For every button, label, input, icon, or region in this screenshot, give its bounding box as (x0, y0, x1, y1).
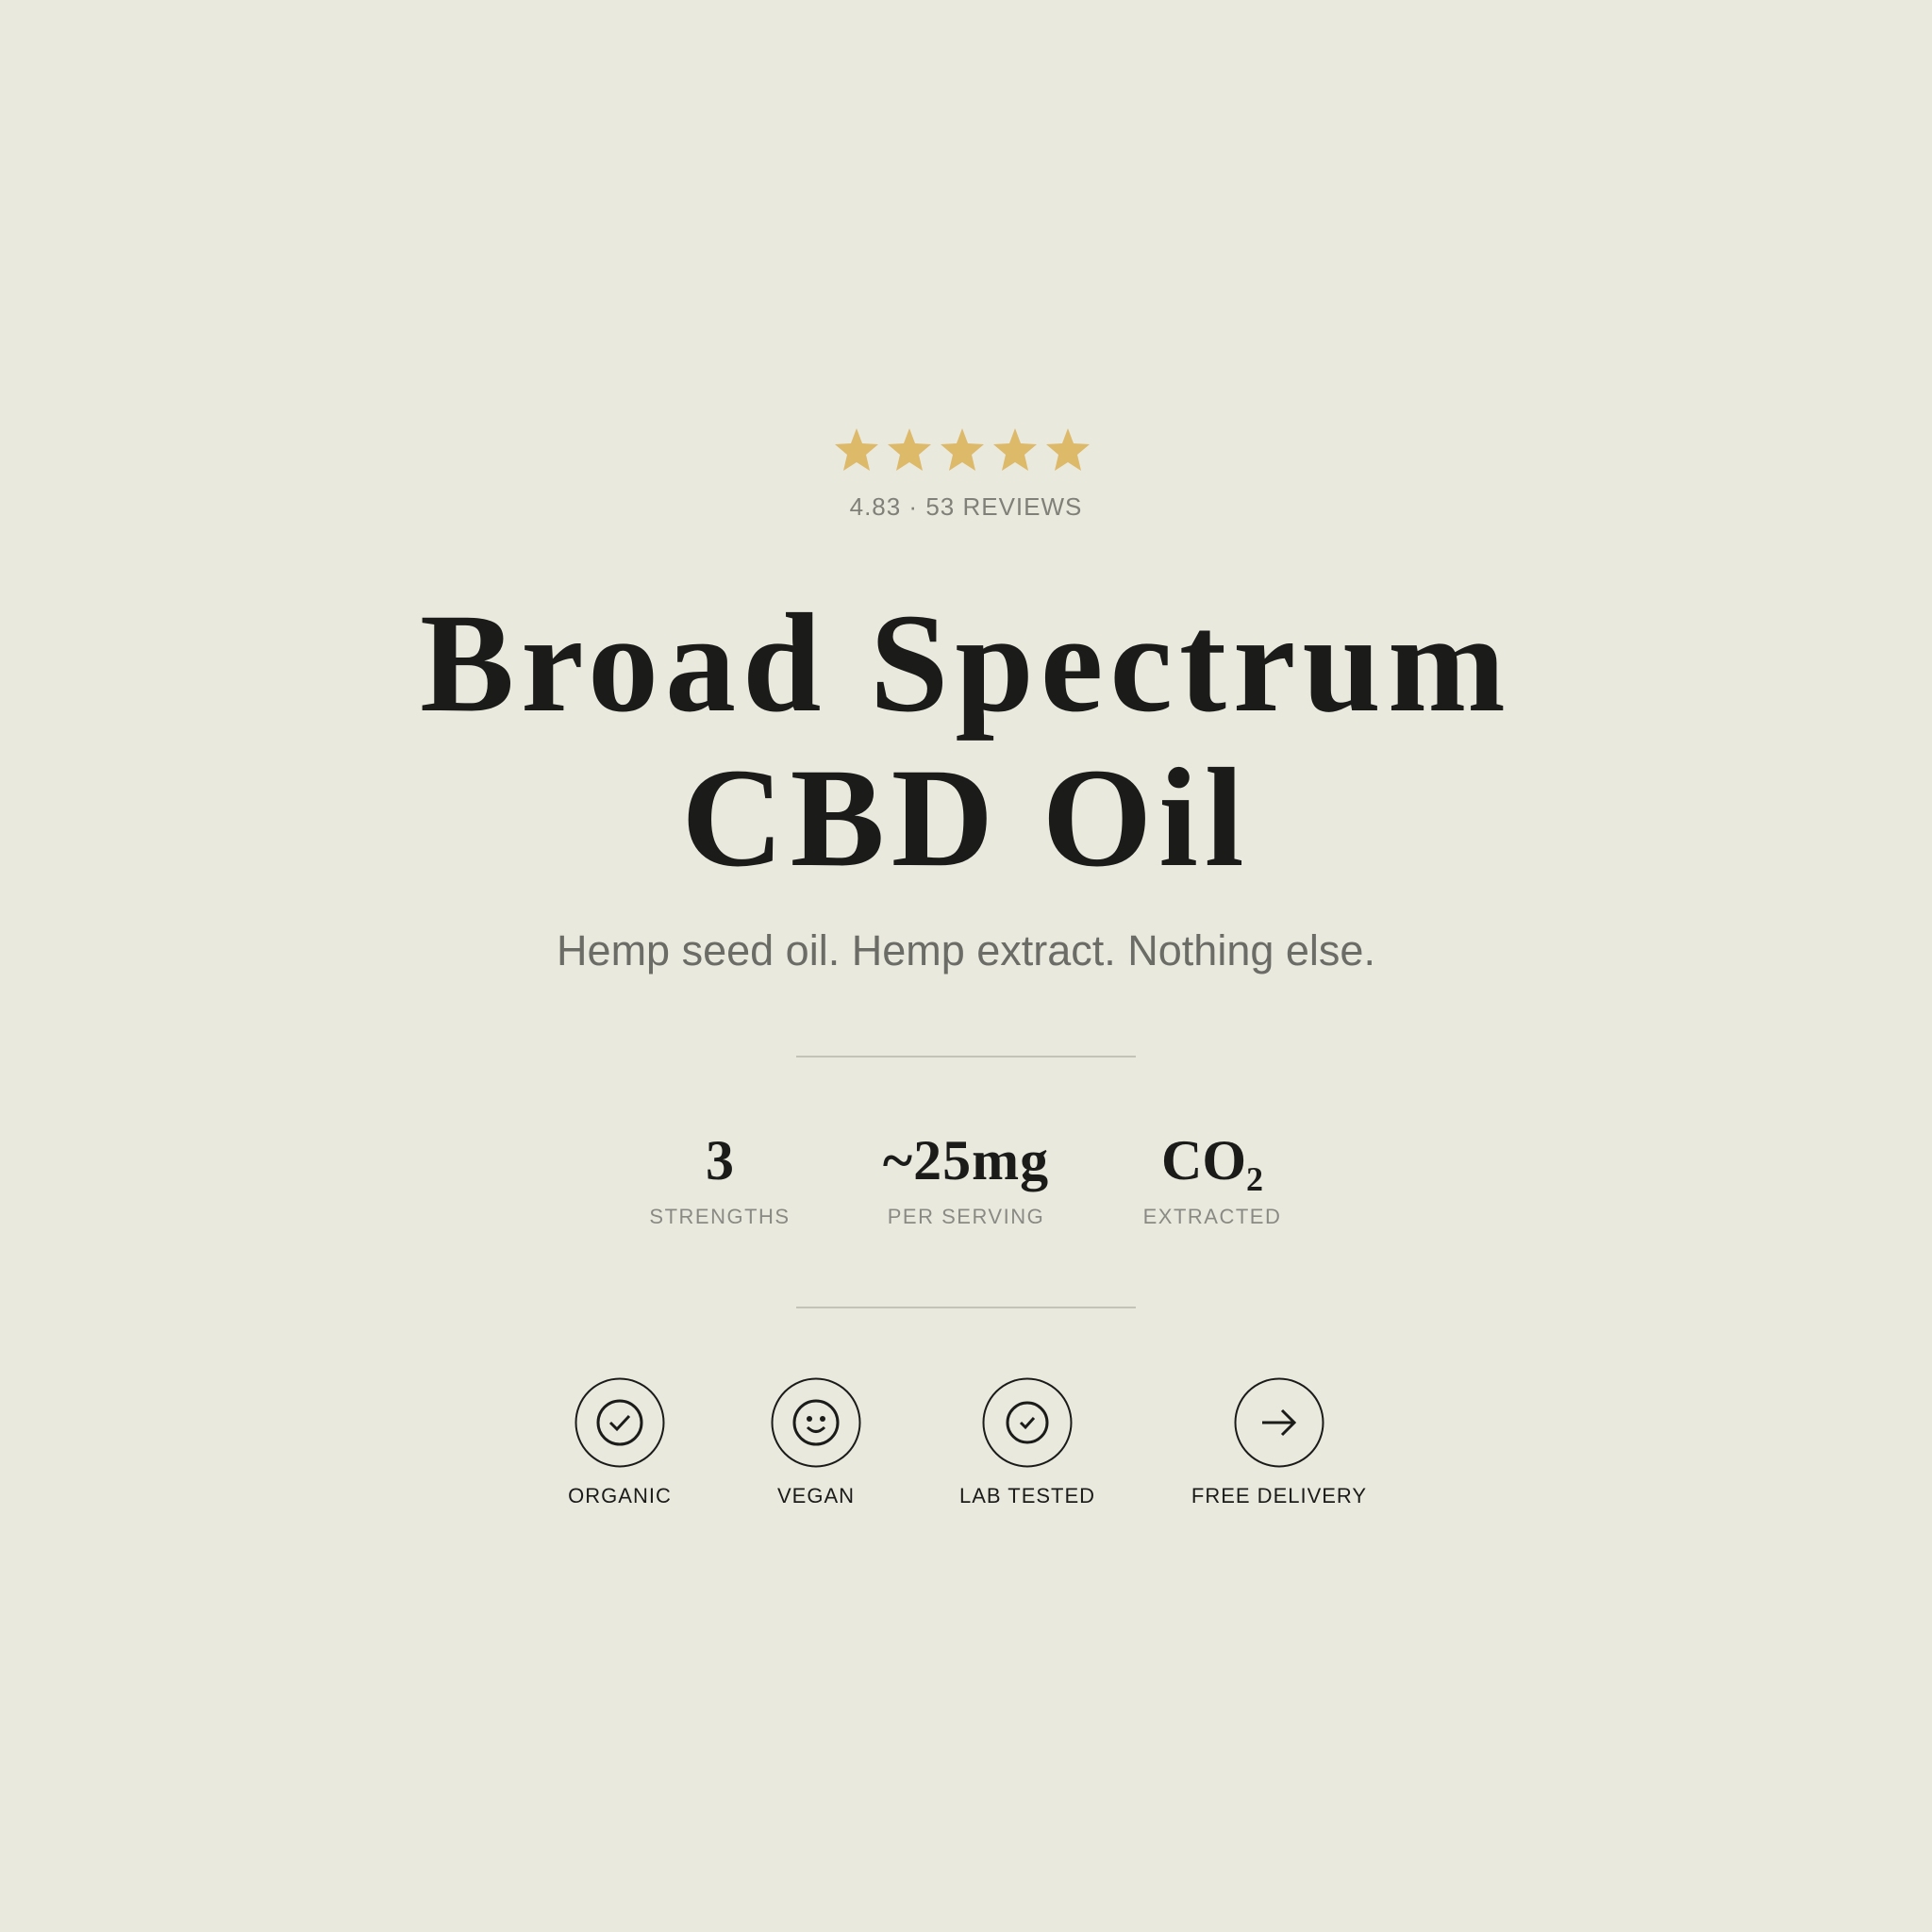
stat: strengths (649, 1129, 791, 1228)
badge: vegan: VEGAN (777, 1484, 855, 1507)
badge: free delivery (1191, 1377, 1367, 1507)
stats row (649, 1129, 1281, 1228)
stat: strengths: STRENGTHS (649, 1205, 791, 1228)
stat: extracted (1143, 1129, 1281, 1228)
subtitle: Hemp seed oil. Hemp extract. Nothing else. (557, 926, 1375, 974)
rating stars (835, 428, 1090, 471)
stat: strengths: 3 (706, 1129, 734, 1191)
stat: per serving (883, 1129, 1049, 1228)
stat: per serving: ~25mg (883, 1129, 1049, 1191)
badge: lab tested: LAB TESTED (959, 1484, 1095, 1507)
badge: organic: ORGANIC (568, 1484, 672, 1507)
title: Broad Spectrum (420, 585, 1512, 741)
stat: per serving: PER SERVING (888, 1205, 1044, 1228)
badge: organic (568, 1377, 672, 1507)
title: CBD Oil (681, 740, 1251, 896)
badges row (568, 1377, 1367, 1507)
title (420, 585, 1512, 896)
stat: extracted: CO₂ (1161, 1129, 1263, 1191)
badge: lab tested (959, 1377, 1095, 1507)
badge: free delivery: FREE DELIVERY (1191, 1484, 1367, 1507)
badge: vegan (772, 1377, 860, 1507)
stat: extracted: EXTRACTED (1143, 1205, 1281, 1228)
rating text: 4.83 · 53 REVIEWS (850, 492, 1082, 521)
